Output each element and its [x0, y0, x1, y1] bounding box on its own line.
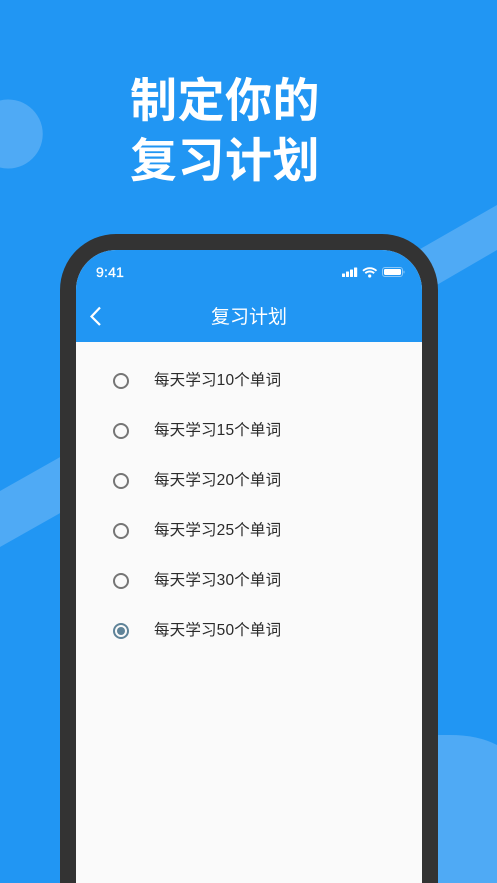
phone screen — [76, 250, 422, 883]
title: 复习计划 — [130, 134, 320, 187]
option: 15 words: 每天学习15个单词 — [154, 422, 281, 439]
phone mockup — [60, 234, 438, 883]
option: 30 words: 每天学习30个单词 — [154, 572, 281, 589]
status bar icons — [342, 267, 404, 278]
option: 10 words: 每天学习10个单词 — [154, 372, 281, 389]
status bar time: 9:41 — [96, 264, 124, 280]
back arrow — [90, 306, 101, 326]
title: 制定你的 — [130, 74, 320, 127]
header title: 复习计划 — [211, 307, 287, 328]
option: 20 words: 每天学习20个单词 — [154, 472, 281, 489]
option: 50 words selected: 每天学习50个单词 — [154, 622, 281, 639]
app header — [76, 250, 422, 342]
option: 25 words: 每天学习25个单词 — [154, 522, 281, 539]
title — [130, 74, 320, 187]
